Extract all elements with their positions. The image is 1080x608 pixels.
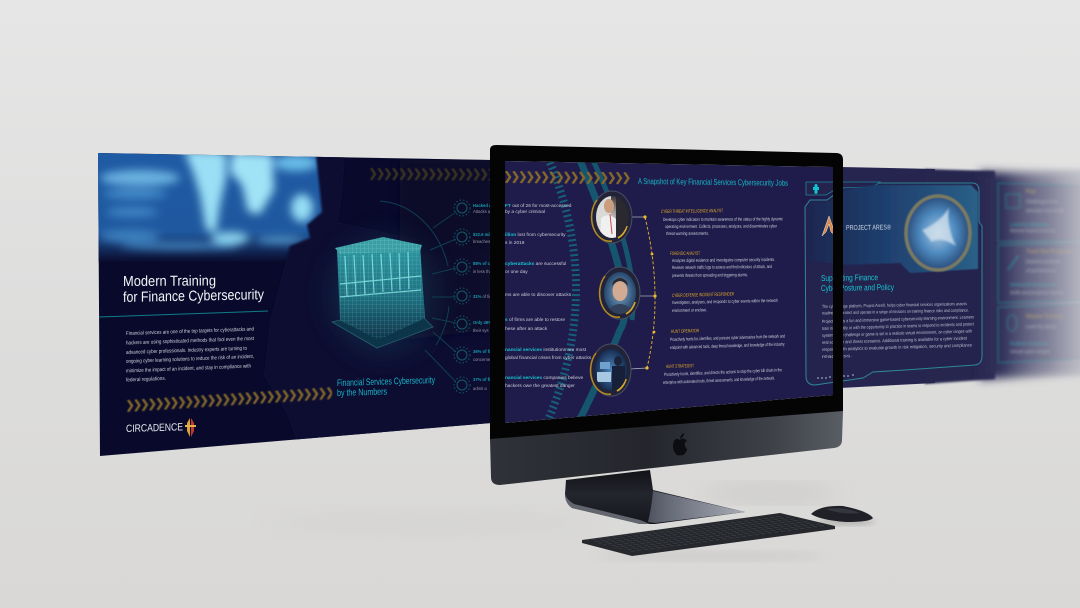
stat labels cut off behind monitor: 31% of fir [473,294,491,299]
hud heading: Supporting Finance [821,272,878,283]
job: hunt strategist: Proactively hunts, identifies, and directs the actions to stop the cyber kill chain in the [664,367,782,377]
hud arcs and connector lines [380,201,456,382]
jobs heading: A Snapshot of Key Financial Services Cybersecurity Jobs [638,177,788,188]
stat labels cut off behind monitor: $22.6 mil [473,232,491,237]
numbers heading: Financial Services Cybersecurity [337,375,435,389]
mouse [811,506,873,522]
left stat fragments: cyberattacks are successful [505,261,566,267]
hud body: real software and threat scenarios. Additional training is available for a cyber incident [822,336,968,345]
job: forensic analyst: Reviews network traffic logs to assess and find indicators of attack, and [672,264,772,270]
stat labels cut off behind monitor: 88% of cyl [473,261,493,266]
stat labels cut off behind monitor: admit a [473,386,487,391]
screen base [505,161,833,423]
hud body: train individually or with the opportunity to practice in teams to respond to incidents and protect [822,321,975,331]
job: cyber defense incident responder: CYBER DEFENSE INCIDENT RESPONDER [672,291,734,299]
job: hunt strategist: HUNT STRATEGIST [666,363,694,370]
job: hunt operator: endpoint with advanced tools, deep threat knowledge, and knowledge of the industry. [670,342,785,350]
left stat fragments: s of firms are able to restore [505,317,565,323]
job: cyber defense incident responder [672,291,779,313]
stat labels cut off behind monitor: in less than [473,269,495,274]
hud body: systems. The challenge or game is set in a realistic virtual environment, on cyber ranges with [822,328,972,338]
world map photo [98,150,330,262]
connector: dashed yellow arc [630,215,657,370]
left stat fragments: global financial crises from cyber attacks [505,355,592,361]
stat labels cut off behind monitor: Only 49% [473,320,492,325]
job: forensic analyst: Analyzes digital evidence and investigates computer security incidents. [672,257,775,263]
card 3: Learn by doing [1026,324,1056,329]
monitor stand [565,470,745,524]
job: hunt strategist [663,363,782,385]
black bezel [490,145,843,440]
title: Modern Training [123,273,216,290]
card 1: simulate real world [1026,208,1064,213]
hud body [822,300,975,359]
card 1: Learning Objectives [1010,222,1051,227]
right edge motion fade [1000,170,1080,375]
photo: male analyst with headset [600,267,640,319]
job: cyber threat intelligence analyst: operating environment. Collects, processes, analyzes, and disseminates cyber [665,223,777,229]
left stat fragments: or one day [505,269,528,275]
photo: female analyst [592,191,632,243]
title [123,275,264,304]
left stat fragments: s in 2019 [505,240,525,246]
card 2: Detailed analysis [1026,259,1061,264]
stat labels cut off behind monitor: 37% of fin [473,377,493,382]
intro text: minimize the impact of an incident, and stay in compliance with [126,364,251,374]
left stat fragments: hese after an attack [505,326,548,332]
title: for Finance Cybersecurity [123,287,265,306]
intro text: Financial services are one of the top targets for cyberattacks and [126,327,254,337]
stat icons [454,200,470,393]
card 1: Play [1026,189,1036,195]
intro text: advanced cyber professionals. Industry experts are turning to [126,346,247,356]
card 1 [998,183,1080,242]
hud body: readiness. [822,353,852,359]
hud heading [821,272,895,293]
card 2: Track Your Progress [1026,249,1072,255]
left stat fragments: nancial services institutions are most [505,347,587,353]
chevron band lower [127,387,332,412]
left stat fragments: by a cyber criminal [505,209,545,215]
project ares wordmark: PROJECT ARES® [846,223,892,232]
card 2: Measured Assessment [1010,282,1056,287]
job: cyber threat intelligence analyst [661,208,783,236]
screen: snapshot of key jobs [505,158,833,425]
intro text: hackers are using sophisticated methods that fool even the most [126,336,254,346]
job: cyber defense incident responder: Investigates, analyzes, and responds to cyber events within the network [672,298,779,305]
panel base [90,150,500,460]
intro text: ongoing cyber learning solutions to reduce the risk of an incident, [126,354,254,365]
chevron band [505,171,630,184]
card 2: of performance [1026,268,1057,273]
right column: blurred feature cards [998,183,1080,363]
stand neck [565,470,745,524]
hud frame outline [805,183,982,385]
card 3 [998,304,1080,363]
panel: modern training for finance cybersecurity [90,150,500,460]
job: hunt operator: Proactively hunts for, identifies, and pursues cyber adversaries from the network and [670,334,785,342]
card 1: Challenges that [1026,199,1058,204]
stat labels cut off behind monitor: Attacks a [473,209,491,214]
teal arc bands [546,158,633,425]
hud heading: Cyber Posture and Policy [821,282,895,293]
numbers heading: by the Numbers [337,386,387,399]
card 3: Virtual cyber ranges [1010,349,1051,354]
keyboard [582,513,835,556]
hud card: project ares [805,182,982,385]
apple logo [673,433,687,455]
card 3: Realistic Scenarios [1010,341,1049,346]
job: cyber threat intelligence analyst: threat warning assessments. [666,231,709,236]
stand lower rim [565,494,650,524]
hud image with portal [808,185,978,273]
job: forensic analyst: FORENSIC ANALYST [670,251,700,257]
stat labels cut off behind monitor: Hacked a [473,203,492,208]
card 3: Mission Training [1026,314,1062,320]
hud body: The cyber range platform, Project Ares®, helps cyber financial services organizations assess [822,300,968,309]
left stat fragments: illion lost from cybersecurity [505,232,566,238]
hud icon [813,184,819,194]
left stat fragments: hackers owe the greatest danger [505,383,575,389]
job: cyber threat intelligence analyst: CYBER THREAT INTELLIGENCE ANALYST [661,208,723,215]
chin [490,411,843,485]
job: hunt strategist: enterprise with automated tools, threat assessments, and knowledge of the network. [663,376,775,385]
hud body: Project Ares is a fun and immersive game-based cybersecurity learning environment. Learners [822,314,975,324]
silhouette of analyst [286,156,490,440]
job: cyber threat intelligence analyst: Develops cyber indicators to maintain awareness of the status of the highly dynamic [663,216,783,222]
left stat fragments: FT out of 26 for most-accessed [505,203,572,209]
job: hunt operator: HUNT OPERATOR [671,328,699,335]
stat labels cut off behind monitor [473,204,490,390]
job: forensic analyst: prevents threats from spreading and triggering alarms. [672,272,748,278]
numbers heading [337,375,435,399]
stand base plate [648,491,745,523]
card 1: Mission-based training [1010,228,1056,233]
job: hunt operator [670,328,785,350]
building hologram [328,235,438,355]
card 2: Skills and progress reports [1010,290,1064,295]
hud body: response with analytics to evaluate growth in risk mitigation, security and compliance [822,342,972,352]
hud body: readiness to protect and operate in a range of missions on training finance risks and compliance. [822,308,969,315]
job: cyber defense incident responder: environment or enclave. [672,307,707,313]
card 2 [998,243,1080,303]
logo: circadence: CIRCADENCE [126,421,183,435]
intro text [126,327,254,383]
job: forensic analyst [670,251,775,278]
title rule [98,311,268,317]
left stat fragments [505,203,592,389]
ares logo [822,216,836,236]
hud tab [806,182,880,195]
stat labels cut off behind monitor: concerned [473,357,493,362]
photo: operator at screens [591,344,631,396]
stat labels cut off behind monitor: 36% of fin [473,349,493,354]
intro text: federal regulations. [126,376,166,383]
floor shadows beneath the monitor and peripherals [260,488,875,560]
stat labels cut off behind monitor: breaches [473,239,490,244]
left stat fragments: ms are able to discover attacks [505,292,572,298]
panel: project ares background [840,167,1080,388]
chevron band upper [370,168,490,181]
hud pagination dots [817,374,854,379]
left stat fragments: nancial services companies believe [505,375,583,381]
monitor: imac frame [490,145,843,485]
stat labels cut off behind monitor: their sys [473,328,489,333]
